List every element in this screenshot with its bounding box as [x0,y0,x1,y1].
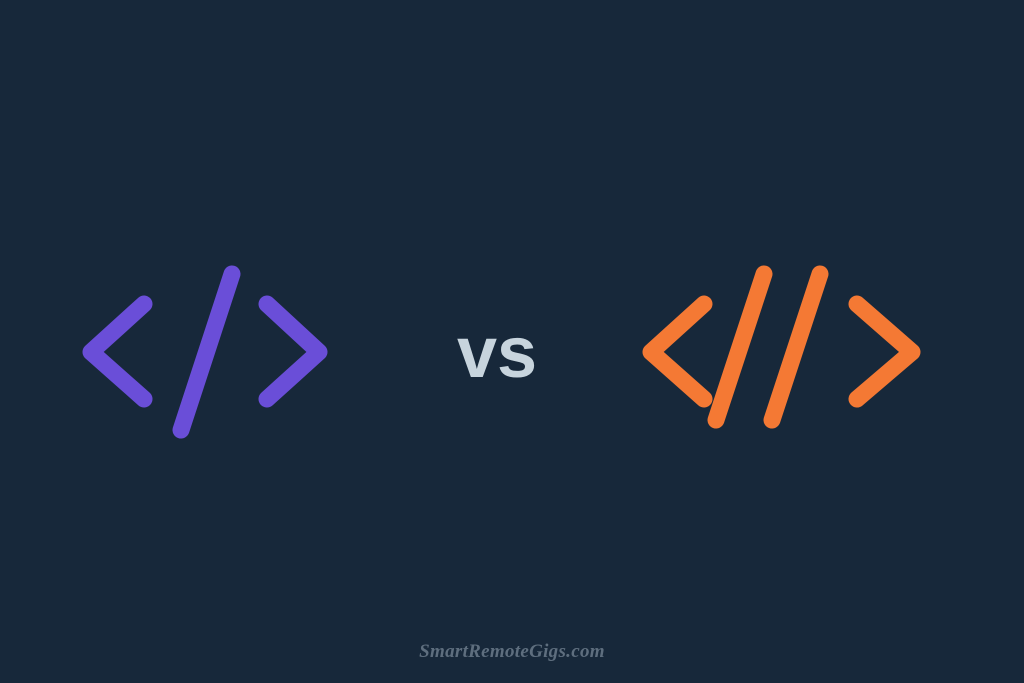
vs label: vs [457,313,537,393]
icon: purple code tag [91,274,319,430]
icon: orange double-slash tag [651,274,912,420]
footer brand: SmartRemoteGigs.com [419,641,605,662]
